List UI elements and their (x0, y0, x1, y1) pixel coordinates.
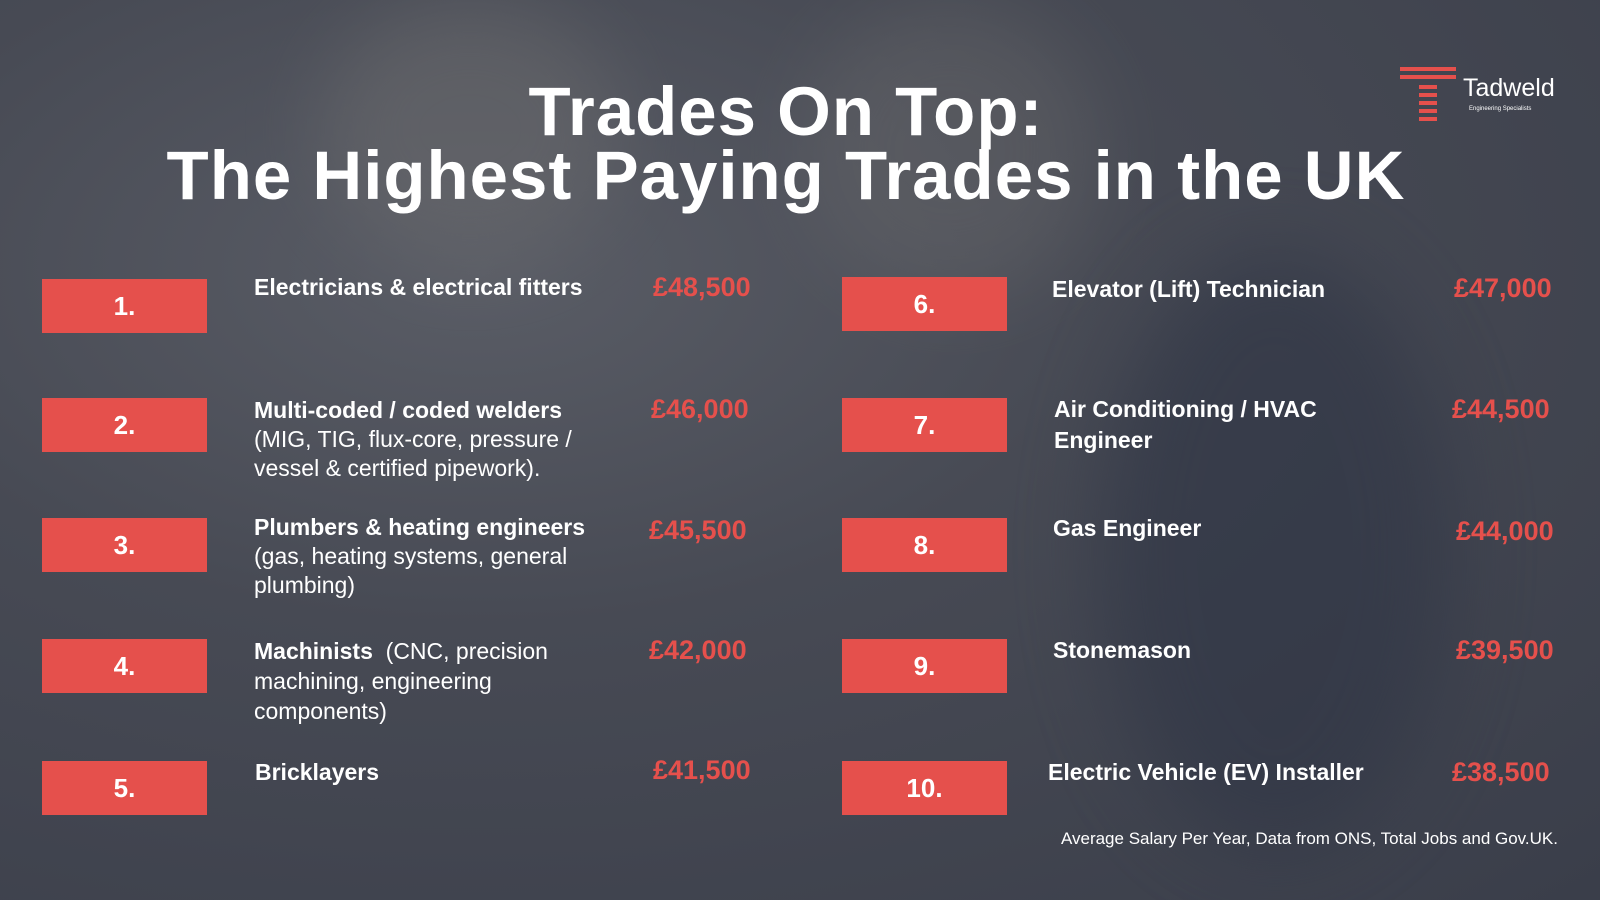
text: £44,500 (1452, 394, 1550, 424)
row 9: 9. (914, 651, 935, 681)
text: £41,500 (653, 755, 751, 785)
text: £46,000 (651, 394, 749, 424)
text: vessel & certified pipework). (254, 455, 540, 481)
row 2: 2. (114, 410, 135, 440)
text: £47,000 (1454, 273, 1552, 303)
text: (MIG, TIG, flux-core, pressure / (254, 426, 572, 452)
text: £38,500 (1452, 757, 1550, 787)
row 8: 8. (914, 530, 935, 560)
text: Machinists (CNC, precision (254, 638, 548, 664)
row 10: 10. (906, 773, 943, 803)
text: Multi-coded / coded welders (254, 397, 562, 423)
row 4 (42, 639, 207, 693)
text: £42,000 (649, 635, 747, 665)
row 6 (842, 277, 1007, 331)
text: Stonemason (1053, 637, 1191, 663)
row 1 (42, 279, 207, 333)
text: £44,000 (1456, 516, 1554, 546)
text: plumbing) (254, 572, 355, 598)
text: Elevator (Lift) Technician (1052, 276, 1325, 302)
text: Electric Vehicle (EV) Installer (1048, 759, 1364, 785)
title (167, 73, 1405, 214)
logo (1400, 67, 1555, 121)
row 6: 6. (914, 289, 935, 319)
text: (gas, heating systems, general (254, 543, 567, 569)
text: Bricklayers (255, 759, 379, 785)
text: machining, engineering (254, 668, 492, 694)
row 1: 1. (114, 291, 135, 321)
text: £45,500 (649, 515, 747, 545)
row 3 (42, 518, 207, 572)
row 7: 7. (914, 410, 935, 440)
logo: Engineering Specialists (1469, 106, 1531, 112)
text: Engineer (1054, 427, 1152, 453)
row 3: 3. (114, 530, 135, 560)
row 5 (42, 761, 207, 815)
footnote: Average Salary Per Year, Data from ONS, Total Jobs and Gov.UK. (1061, 829, 1558, 848)
row 9 (842, 639, 1007, 693)
text: £39,500 (1456, 635, 1554, 665)
text: Electricians & electrical fitters (254, 274, 583, 300)
row 8 (842, 518, 1007, 572)
row 4: 4. (114, 651, 135, 681)
text: £48,500 (653, 272, 751, 302)
title: Trades On Top: (529, 73, 1043, 150)
row 7 (842, 398, 1007, 452)
text: Air Conditioning / HVAC (1054, 396, 1317, 422)
row 2 (42, 398, 207, 452)
text: Gas Engineer (1053, 515, 1201, 541)
row 5: 5. (114, 773, 135, 803)
text: Plumbers & heating engineers (254, 514, 585, 540)
row 10 (842, 761, 1007, 815)
logo: Tadweld (1463, 74, 1555, 102)
text: components) (254, 698, 387, 724)
title: The Highest Paying Trades in the UK (167, 137, 1405, 214)
